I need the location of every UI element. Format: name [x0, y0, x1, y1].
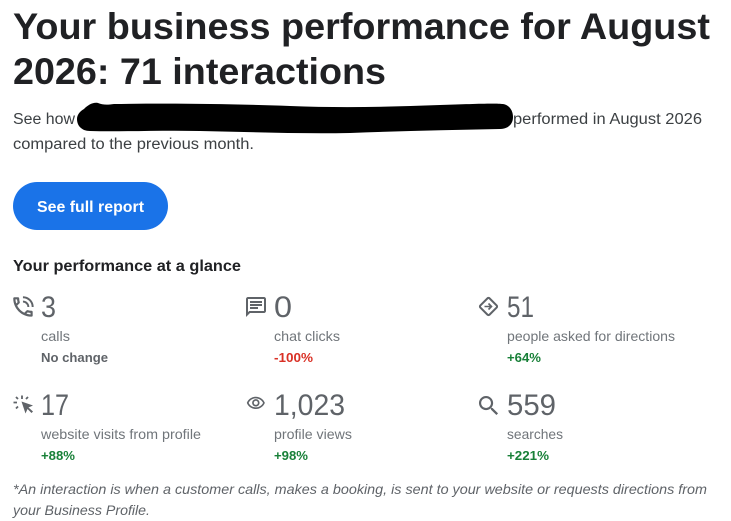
metric: directions: 51: [507, 291, 534, 324]
redaction scribble: [77, 103, 513, 133]
metric: chat clicks: 0: [274, 291, 292, 324]
title: [13, 6, 710, 92]
metric: profile views: profile views: [274, 426, 352, 442]
intro text: See how: [13, 111, 76, 128]
metric: calls: No change: [41, 350, 108, 365]
title: 2026: 71 interactions: [13, 51, 386, 92]
intro text: compared to the previous month.: [13, 136, 254, 153]
metric: calls: calls: [41, 328, 70, 344]
footnote: [12, 481, 707, 518]
footnote: your Business Profile.: [12, 502, 150, 518]
metric: chat clicks: chat clicks: [274, 328, 340, 344]
metric: website visits: [14, 389, 201, 463]
icon: click cursor: [14, 396, 33, 414]
metric: searches: [479, 389, 563, 463]
metric: directions: +64%: [507, 350, 541, 365]
section heading: Your performance at a glance: [13, 258, 241, 275]
metric: directions: people asked for directions: [507, 328, 675, 344]
metric: profile views: +98%: [274, 448, 308, 463]
icon: phone: [13, 297, 33, 317]
metric: website visits: +88%: [41, 448, 75, 463]
footnote: *An interaction is when a customer calls, makes a booking, is sent to your website or requests directions from: [13, 481, 707, 497]
metric: calls: [13, 291, 108, 365]
metric: chat clicks: -100%: [274, 350, 313, 365]
see full report button: [13, 182, 168, 230]
intro text: performed in August 2026: [513, 111, 702, 128]
metric: searches: 559: [507, 389, 556, 422]
metric: directions: [479, 291, 675, 365]
icon: directions: [479, 297, 498, 316]
intro text: [13, 111, 702, 153]
metric: website visits: website visits from profile: [40, 426, 201, 442]
icon: eye: [247, 397, 265, 409]
metric: searches: searches: [507, 426, 563, 442]
icon: search: [479, 396, 498, 415]
metric: calls: 3: [41, 291, 56, 324]
metric: searches: +221%: [507, 448, 549, 463]
title: Your business performance for August: [13, 6, 710, 47]
metric: profile views: [247, 389, 352, 463]
metric: chat clicks: [246, 291, 340, 365]
icon: chat: [246, 297, 266, 317]
metric: website visits: 17: [41, 389, 69, 422]
metric: profile views: 1,023: [274, 389, 345, 422]
see full report button: See full report: [37, 199, 145, 216]
